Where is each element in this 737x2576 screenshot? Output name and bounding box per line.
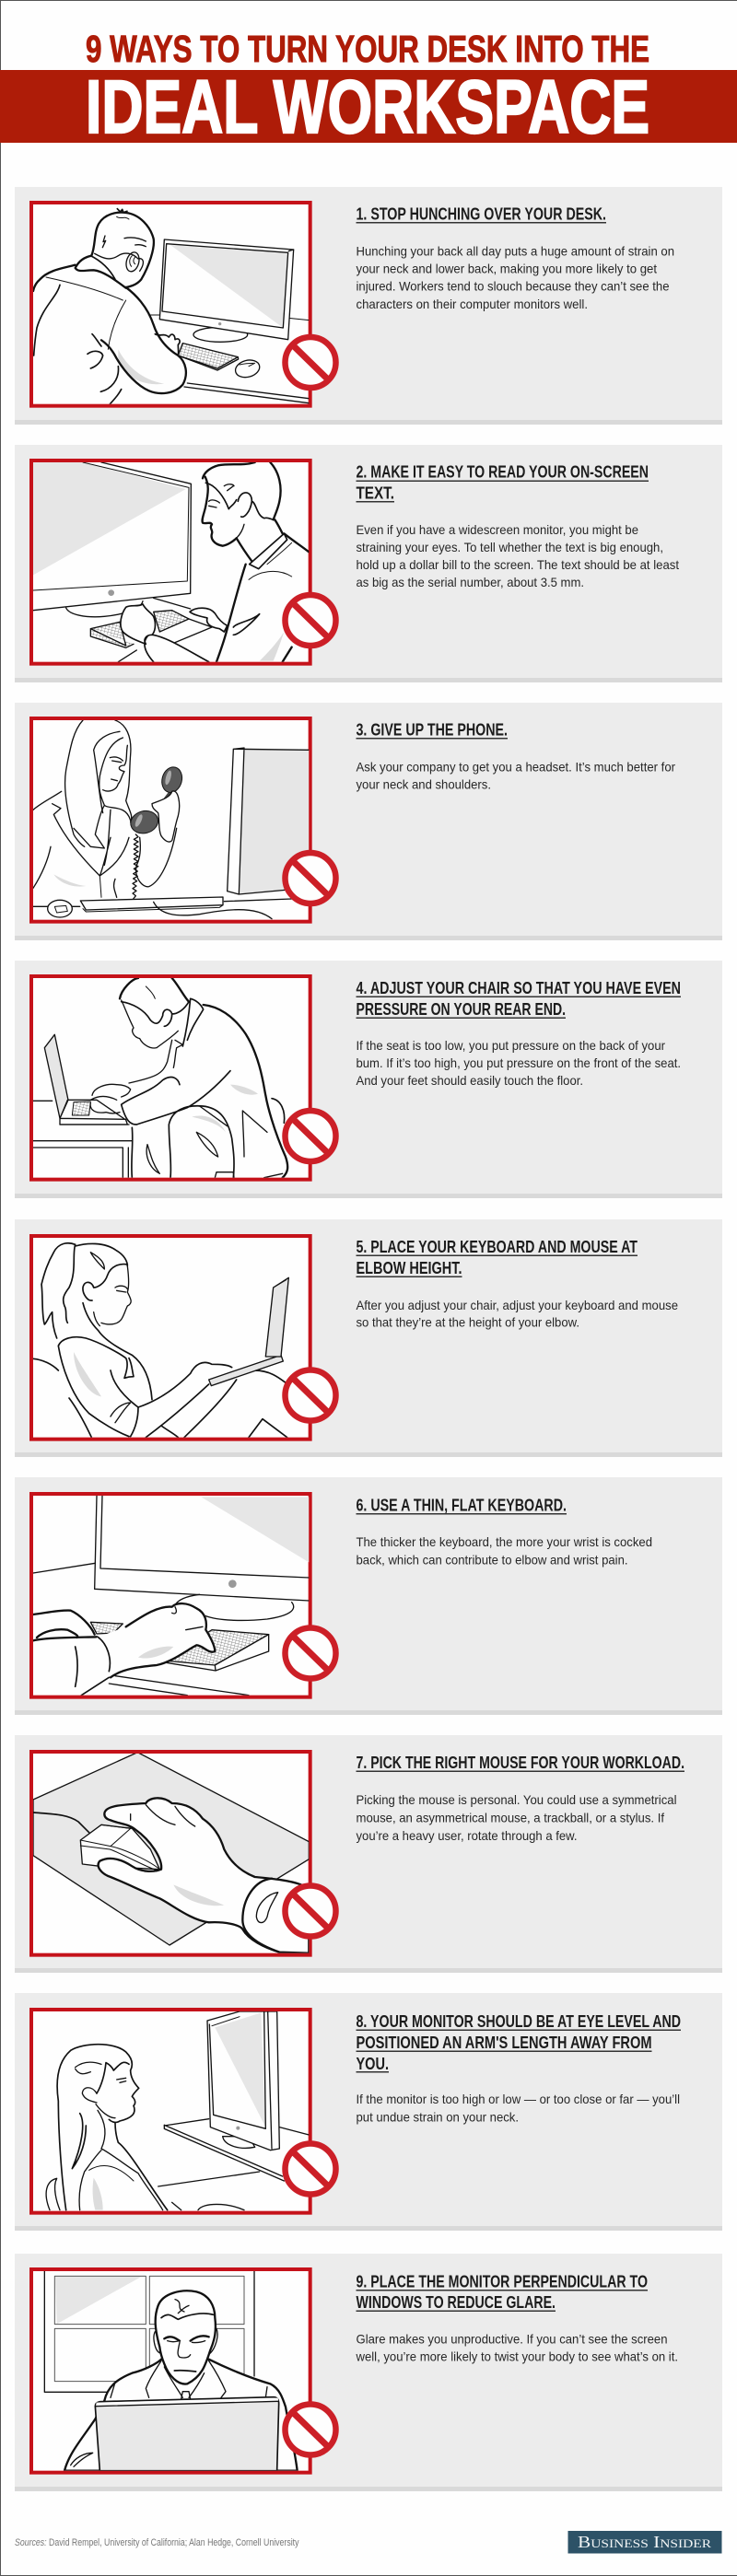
heading: 5. PLACE YOUR KEYBOARD AND MOUSE AT: [356, 1238, 638, 1256]
title: [0, 28, 737, 149]
body text: you’re a heavy user, rotate through a few.: [356, 1828, 577, 1843]
body text: [356, 1038, 681, 1088]
heading: [356, 1238, 638, 1277]
body text: If the seat is too low, you put pressure on the back of your: [356, 1038, 665, 1053]
illustration: woman on phone: [31, 718, 310, 922]
no sign: [286, 853, 335, 903]
illustration: man seated at laptop: [31, 976, 310, 1180]
illustration: woman facing raised monitor: [31, 2010, 310, 2213]
heading: YOU.: [356, 2055, 389, 2073]
heading: [356, 2273, 648, 2312]
body text: The thicker the keyboard, the more your wrist is cocked: [356, 1534, 652, 1549]
heading: [356, 2012, 681, 2073]
panel: tip 6: [15, 1477, 722, 1715]
body text: put undue strain on your neck.: [356, 2109, 519, 2124]
body text: And your feet should easily touch the floor.: [356, 1073, 583, 1088]
no sign: [286, 2144, 335, 2194]
no sign: [286, 1886, 335, 1936]
sources note: Sources: David Rempel, University of California; Alan Hedge, Cornell University: [15, 2537, 299, 2548]
business insider logo: [567, 2531, 722, 2553]
panel: tip 7: [15, 1735, 722, 1973]
body text: your neck and shoulders.: [356, 777, 491, 792]
heading: [356, 979, 681, 1019]
heading: [356, 462, 649, 503]
body text: Hunching your back all day puts a huge amount of strain on: [356, 243, 674, 258]
panel: tip 4: [15, 961, 722, 1198]
illustration: man with window behind: [31, 2269, 310, 2473]
body text: [356, 1792, 676, 1843]
panel: tip 2: [15, 445, 722, 682]
body text: Even if you have a widescreen monitor, you might be: [356, 522, 638, 537]
heading: ELBOW HEIGHT.: [356, 1259, 462, 1277]
illustration: man leaning toward screen: [31, 460, 310, 664]
body text: characters on their computer monitors well.: [356, 297, 588, 311]
heading: 9. PLACE THE MONITOR PERPENDICULAR TO: [356, 2273, 648, 2291]
body text: hold up a dollar bill to the screen. The text should be at least: [356, 557, 679, 572]
heading: 2. MAKE IT EASY TO READ YOUR ON-SCREEN: [356, 462, 649, 481]
body text: [356, 1534, 652, 1568]
body text: your neck and lower back, making you more likely to get: [356, 262, 657, 276]
no sign: [286, 2404, 335, 2455]
heading: 6. USE A THIN, FLAT KEYBOARD.: [356, 1496, 567, 1514]
no sign: [286, 1628, 335, 1678]
no sign: [286, 1111, 335, 1161]
no sign: [286, 1370, 335, 1420]
no sign: [286, 337, 335, 388]
body text: Picking the mouse is personal. You could use a symmetrical: [356, 1792, 676, 1807]
body text: Glare makes you unproductive. If you can’t see the screen: [356, 2332, 667, 2347]
body text: If the monitor is too high or low — or too close or far — you’ll: [356, 2092, 680, 2106]
body text: [356, 522, 679, 589]
illustration: hands on thick keyboard: [31, 1494, 310, 1697]
panel: tip 3: [15, 703, 722, 940]
body text: [356, 2092, 680, 2124]
business insider logo: Business Insider: [578, 2533, 711, 2551]
body text: [356, 2332, 678, 2363]
heading: 3. GIVE UP THE PHONE.: [356, 720, 508, 739]
panel: tip 8: [15, 1993, 722, 2231]
body text: as big as the serial number, about 3.5 mm.: [356, 575, 584, 589]
panel: tip 1: [15, 187, 722, 425]
body text: bum. If it’s too high, you put pressure on the front of the seat.: [356, 1055, 681, 1070]
body text: straining your eyes. To tell whether the text is big enough,: [356, 540, 663, 554]
heading: WINDOWS TO REDUCE GLARE.: [356, 2293, 556, 2312]
heading: PRESSURE ON YOUR REAR END.: [356, 1000, 566, 1019]
no sign: [286, 595, 335, 646]
body text: injured. Workers tend to slouch because they can’t see the: [356, 279, 670, 294]
illustration: hand on mouse: [31, 1752, 310, 1955]
panel: tip 9: [15, 2254, 722, 2491]
body text: Ask your company to get you a headset. It’s much better for: [356, 759, 675, 774]
heading: 1. STOP HUNCHING OVER YOUR DESK.: [356, 204, 606, 223]
heading: POSITIONED AN ARM'S LENGTH AWAY FROM: [356, 2034, 652, 2052]
body text: well, you’re more likely to twist your body to see what’s on it.: [356, 2349, 678, 2363]
panel: tip 5: [15, 1219, 722, 1457]
heading: TEXT.: [356, 484, 394, 503]
body text: After you adjust your chair, adjust your keyboard and mouse: [356, 1298, 678, 1312]
body text: [356, 243, 674, 311]
body text: [356, 759, 675, 792]
illustration: hunched man at desk: [31, 203, 310, 406]
illustration: woman with laptop on lap: [31, 1236, 310, 1440]
body text: [356, 1298, 678, 1330]
body text: mouse, an asymmetrical mouse, a trackball, or a stylus. If: [356, 1811, 664, 1825]
body text: so that they’re at the height of your elbow.: [356, 1315, 579, 1330]
body text: back, which can contribute to elbow and wrist pain.: [356, 1553, 628, 1568]
